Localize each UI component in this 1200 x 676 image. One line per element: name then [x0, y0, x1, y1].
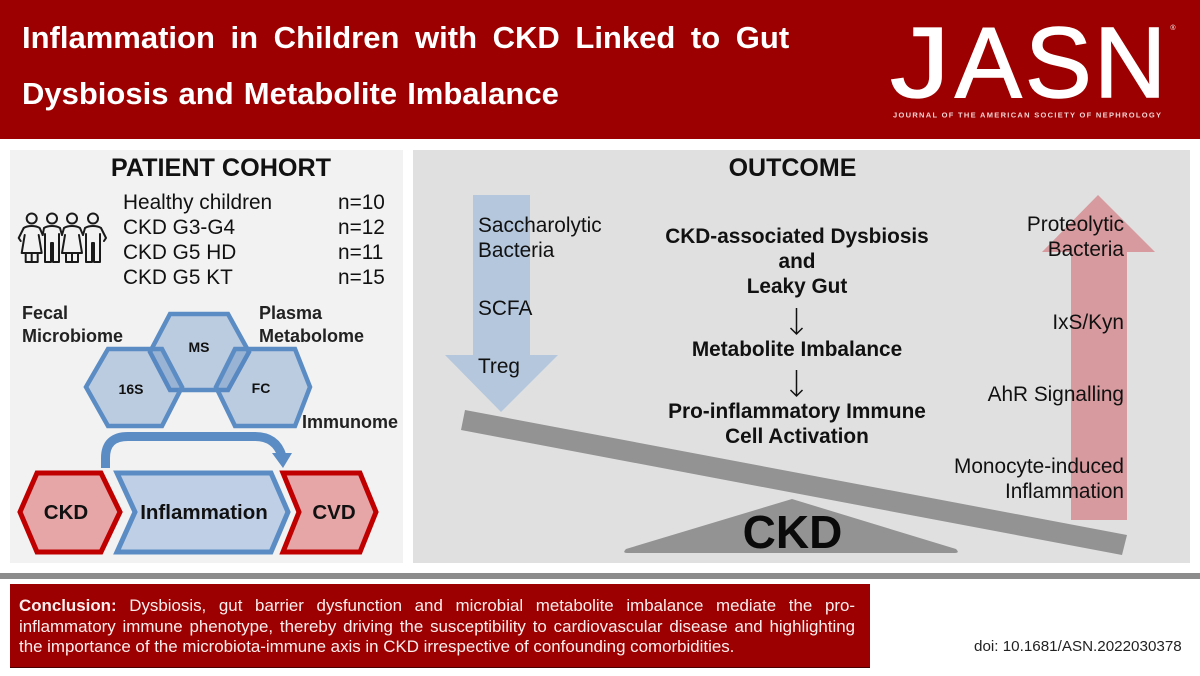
conclusion box — [10, 584, 870, 668]
hexagon labels: MS — [188, 339, 210, 355]
omics labels — [22, 303, 398, 432]
increased items: AhR Signalling — [988, 383, 1124, 406]
conclusion box: Conclusion: Dysbiosis, gut barrier dysfunction and microbial metabolite imbalance mediate the pro- — [19, 596, 855, 615]
increased items: Bacteria — [1048, 238, 1124, 261]
JASN logo: J — [890, 7, 950, 119]
hexagons: omics — [86, 314, 310, 426]
chevron: CVD — [283, 473, 376, 552]
divider bar — [0, 573, 1200, 579]
omics labels: Fecal — [22, 303, 68, 323]
omics labels: Metabolome — [259, 326, 364, 346]
arrow: metabolite imbalance to immune activation — [790, 370, 802, 396]
icon: children group — [19, 214, 106, 262]
cohort list: n=12 — [338, 216, 385, 239]
JASN logo: ASN — [955, 7, 1166, 119]
JASN logo: ® — [1170, 24, 1176, 32]
increased items — [954, 213, 1124, 503]
conclusion box: the importance of the microbiota-immune axis in CKD irrespective of confounding comorbidities. — [19, 637, 734, 656]
cohort list: n=11 — [338, 241, 383, 264]
panel: outcome — [413, 150, 1190, 563]
cohort list: CKD G5 HD — [123, 241, 236, 264]
heading: patient cohort: PATIENT COHORT — [111, 154, 332, 182]
hexagon: CKD — [20, 473, 120, 552]
central mechanism text: CKD-associated Dysbiosis — [665, 225, 929, 248]
cohort list: n=15 — [338, 266, 385, 289]
JASN logo: JOURNAL OF THE AMERICAN SOCIETY OF NEPHROLOGY — [893, 110, 1161, 120]
central mechanism text: Metabolite Imbalance — [692, 338, 902, 361]
decreased items: SCFA — [478, 297, 532, 320]
hexagon: CKD: CKD — [44, 501, 88, 524]
decreased items: Treg — [478, 355, 520, 378]
decreased items — [478, 214, 602, 378]
cohort list: CKD G5 KT — [123, 266, 233, 289]
central mechanism text: and — [779, 250, 815, 273]
balance beam — [461, 410, 1127, 555]
header banner — [0, 0, 1200, 139]
cohort list — [123, 191, 385, 289]
central mechanism text — [665, 225, 929, 448]
central mechanism text: Cell Activation — [725, 425, 869, 448]
increased items: IxS/Kyn — [1052, 311, 1124, 334]
conclusion box: inflammatory immune phenotype, thereby driving the susceptibility to cardiovascular disease and highlighting — [19, 616, 855, 636]
chevron: inflammation — [117, 473, 288, 552]
title — [22, 20, 789, 111]
increased items: Inflammation — [1005, 480, 1124, 503]
doi: doi: 10.1681/ASN.2022030378 — [974, 638, 1182, 655]
chevron: CVD: CVD — [312, 501, 356, 524]
omics labels: Microbiome — [22, 326, 123, 346]
title: Dysbiosis and Metabolite Imbalance — [22, 76, 559, 111]
arrow: up, red — [1042, 195, 1155, 520]
arrow: dysbiosis to metabolite imbalance — [790, 308, 802, 334]
panel: patient cohort — [10, 150, 403, 563]
heading: outcome: OUTCOME — [729, 154, 856, 182]
title: Inflammation in Children with CKD Linked to Gut — [22, 20, 789, 55]
cohort list: CKD G3-G4 — [123, 216, 235, 239]
increased items: Monocyte-induced — [954, 455, 1124, 478]
decreased items: Saccharolytic — [478, 214, 602, 237]
hexagon labels: FC — [252, 380, 270, 396]
arrow: down, blue — [445, 195, 558, 412]
hexagon labels: 16S — [119, 381, 143, 397]
omics labels: Immunome — [302, 412, 398, 432]
fulcrum triangle with CKD — [624, 499, 958, 558]
hexagon labels — [119, 339, 270, 397]
central mechanism text: Pro-inflammatory Immune — [668, 400, 926, 423]
increased items: Proteolytic — [1027, 213, 1124, 236]
cohort list: Healthy children — [123, 191, 272, 214]
central mechanism text: Leaky Gut — [747, 275, 847, 298]
chevron: inflammation: Inflammation — [140, 501, 268, 524]
cohort list: n=10 — [338, 191, 385, 214]
omics labels: Plasma — [259, 303, 323, 323]
fulcrum triangle with CKD: CKD — [743, 506, 842, 558]
arrow: curved over inflammation — [106, 436, 292, 468]
decreased items: Bacteria — [478, 239, 555, 262]
